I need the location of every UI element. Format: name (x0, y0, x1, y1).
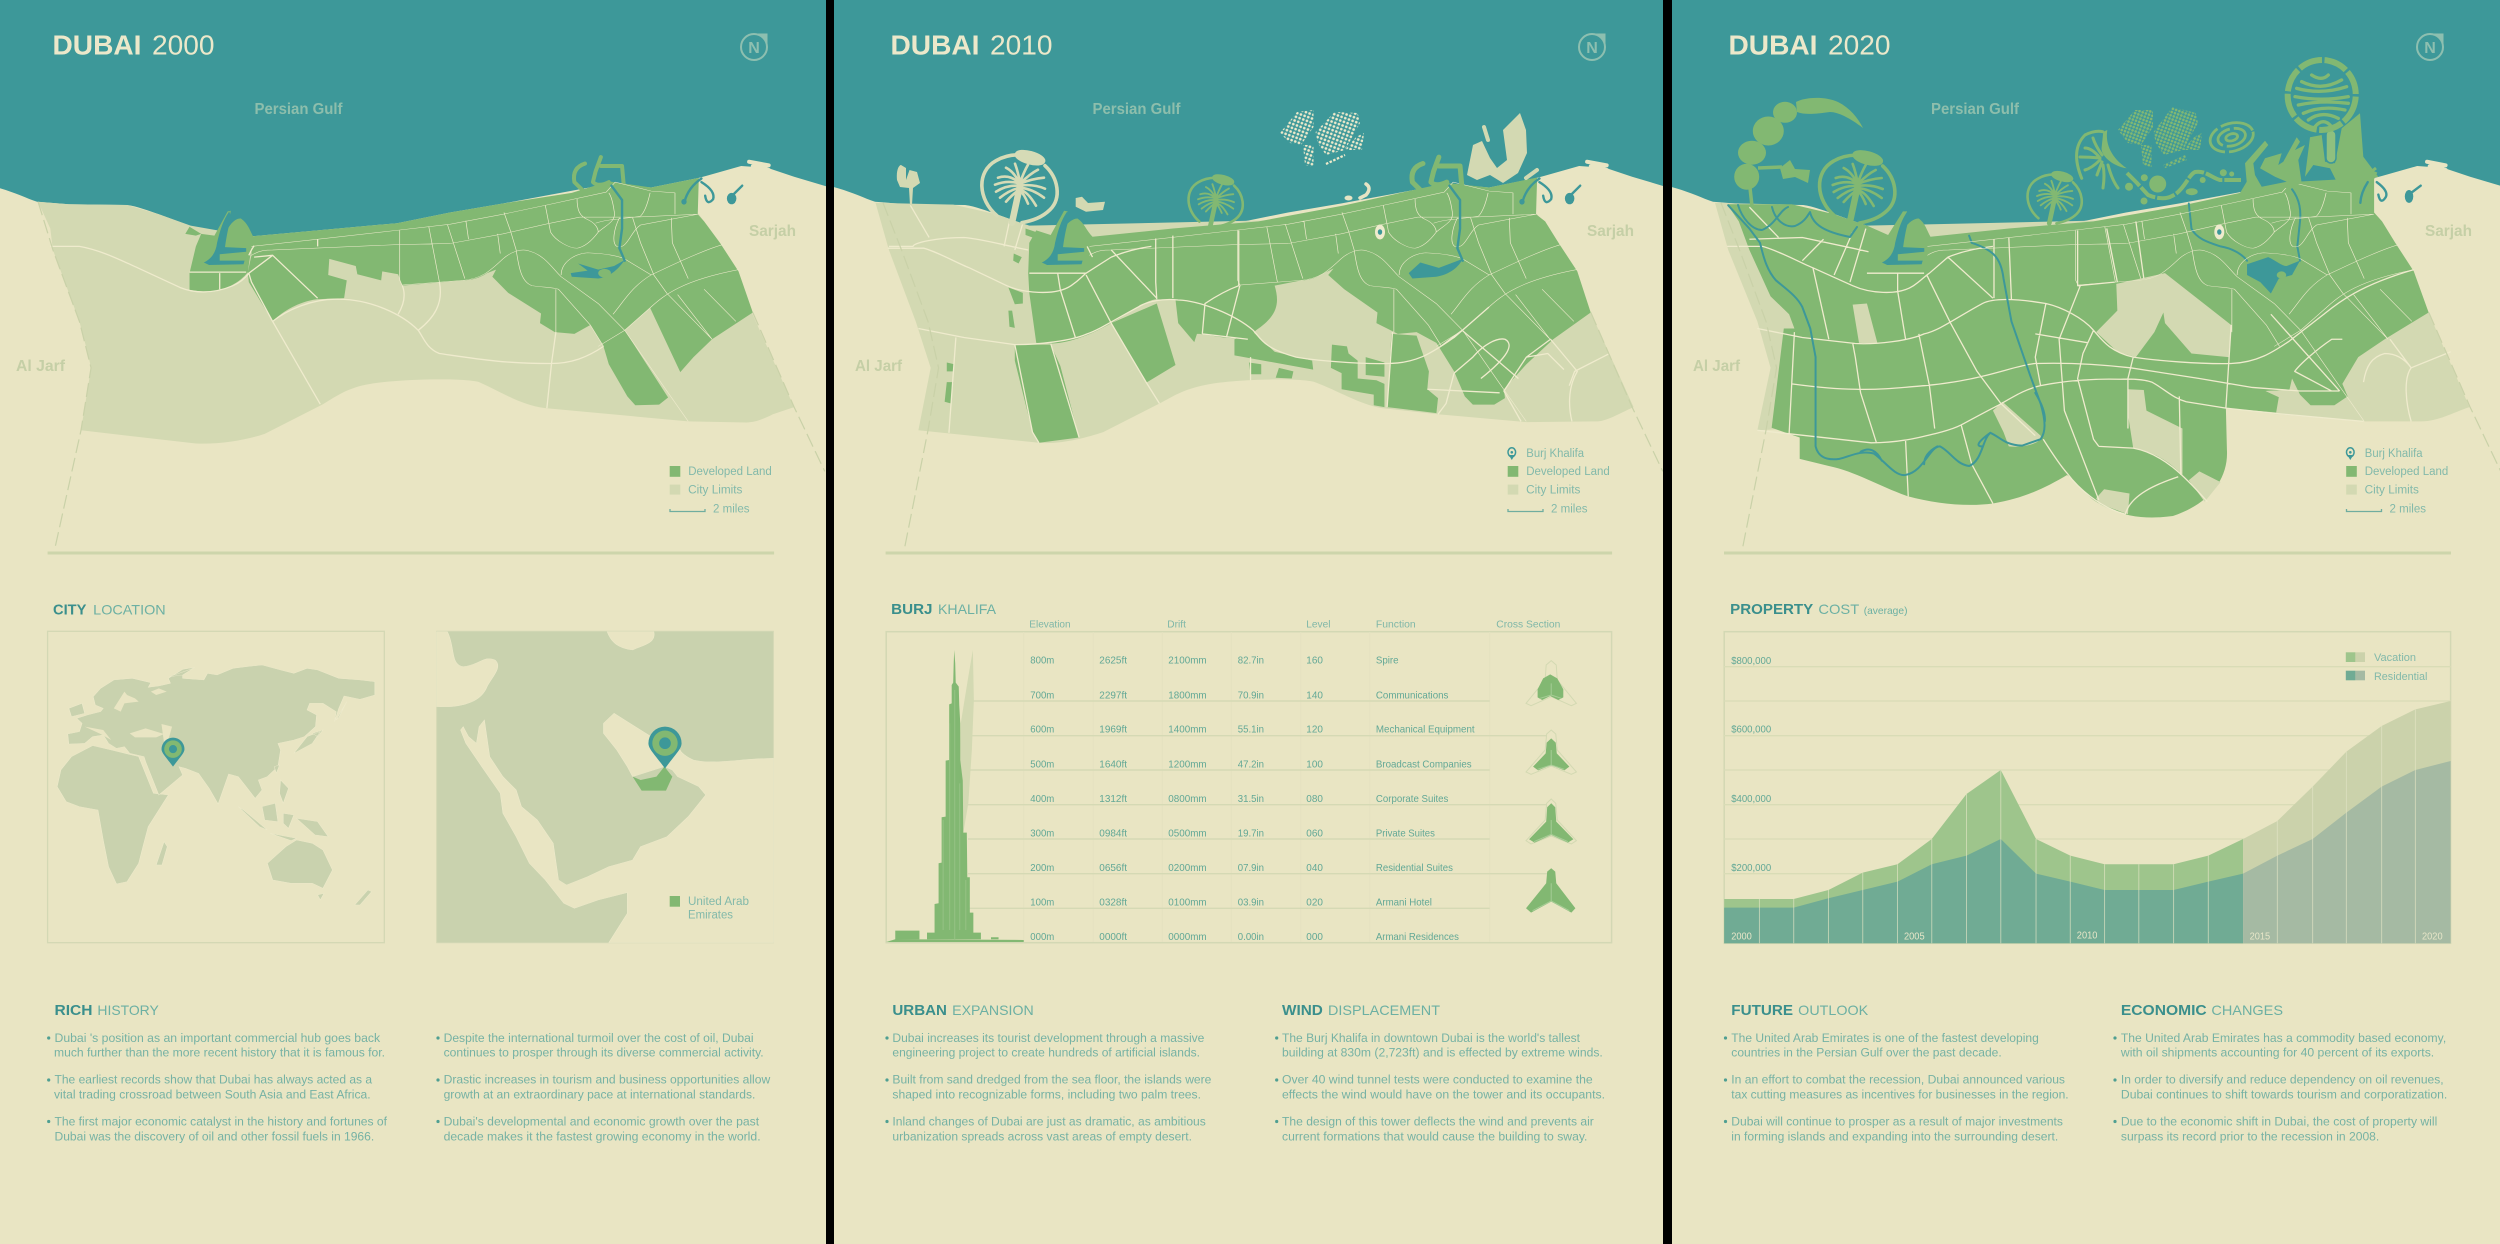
heading: burj khalifa: BURJ (891, 602, 932, 618)
table rows: 000 (1306, 932, 1323, 943)
table rows: 300m (1030, 828, 1054, 839)
text block: rich history (47, 1002, 770, 1143)
table rows: Corporate Suites (1376, 794, 1448, 805)
legend: Developed Land (2365, 466, 2448, 478)
table rows: Mechanical Equipment (1376, 725, 1475, 736)
chart legend (2346, 652, 2427, 683)
title: 2000 (152, 29, 214, 60)
heading: property cost: PROPERTY (1730, 602, 1814, 618)
world map (48, 631, 384, 943)
text block: wind displacement: The design of this tower deflects the wind and prevents air (1282, 1114, 1594, 1128)
table headers: Level (1306, 619, 1330, 630)
table rows: 0200mm (1168, 863, 1207, 874)
map labels (16, 101, 796, 375)
table headers: Cross Section (1496, 619, 1560, 630)
legend: Developed Land (1526, 466, 1610, 478)
chart legend: Residential (2374, 671, 2427, 683)
axis labels: 2005 (1904, 931, 1925, 942)
axis labels (1731, 656, 2443, 942)
text block: economic changes: with oil shipments accounting for 40 percent of its exports. (2120, 1046, 2434, 1060)
map labels: Al Jarf (16, 358, 66, 375)
table rows: 140 (1306, 690, 1323, 701)
text block: wind displacement: building at 830m (2,723ft) and is effected by extreme winds. (1282, 1046, 1603, 1060)
text block: wind displacement (1275, 1002, 1605, 1143)
map labels: Sarjah (1587, 223, 1634, 240)
icon: north: N (1586, 40, 1598, 57)
table rows: 31.5in (1238, 794, 1264, 805)
text block: economic changes: ECONOMIC (2121, 1003, 2207, 1019)
text block: wind displacement: DISPLACEMENT (1328, 1002, 1440, 1018)
text block: wind displacement: effects the wind would have on the tower and its occupants. (1282, 1087, 1605, 1101)
text block: urban expansion: urbanization spreads across vast areas of empty desert. (892, 1129, 1192, 1143)
axis labels: 2010 (2077, 930, 2098, 941)
map labels (1693, 101, 2472, 375)
text block: urban expansion: Dubai increases its tourist development through a massive (892, 1031, 1205, 1045)
table rows: Residential Suites (1376, 863, 1453, 874)
map labels: Persian Gulf (1931, 101, 2020, 118)
text block: urban expansion: engineering project to create hundreds of artificial islands. (892, 1046, 1200, 1060)
title: DUBAI (890, 29, 980, 60)
text block: economic changes (2113, 1002, 2447, 1143)
legend: City Limits (1526, 485, 1581, 497)
table rows: 2625ft (1099, 656, 1127, 667)
table rows: 160 (1306, 656, 1323, 667)
table rows: 0656ft (1099, 863, 1127, 874)
axis labels: $400,000 (1731, 794, 1772, 805)
legend: City Limits (688, 485, 743, 497)
table headers: Elevation (1029, 619, 1071, 630)
text block: rich history: RICH (54, 1003, 92, 1019)
sea (1660, 0, 2500, 236)
table rows: 82.7in (1238, 656, 1264, 667)
legend (670, 466, 772, 516)
table rows: 1640ft (1099, 759, 1127, 770)
text block: future outlook: FUTURE (1731, 1003, 1793, 1019)
icon: north (741, 34, 768, 60)
area chart: property cost (1724, 632, 2451, 943)
table rows: 100m (1030, 898, 1054, 909)
heading: city location (54, 604, 164, 614)
table headers (1030, 620, 1560, 628)
text block: rich history: much further than the more recent history that it is famous for. (54, 1046, 385, 1060)
table rows: 1312ft (1099, 794, 1127, 805)
table rows: Armani Residences (1376, 932, 1459, 943)
axis labels: 2020 (2422, 931, 2443, 942)
legend: Burj Khalifa (1526, 448, 1585, 460)
table rows: 0000mm (1168, 932, 1207, 943)
chart legend: Vacation (2374, 652, 2416, 664)
axis labels: 2015 (2250, 931, 2271, 942)
table rows: 060 (1306, 828, 1323, 839)
heading: city location: LOCATION (93, 601, 166, 617)
map: Dubai 2000 (38, 157, 825, 550)
title (1730, 35, 1890, 55)
table rows: 2100mm (1168, 656, 1207, 667)
table rows: 1400mm (1168, 725, 1207, 736)
text block: urban expansion (885, 1002, 1212, 1143)
table rows: 0100mm (1168, 898, 1207, 909)
table rows (1030, 656, 1475, 943)
map labels: Al Jarf (855, 358, 903, 375)
map: Dubai 2020 (1715, 55, 2500, 550)
regional map (437, 631, 773, 943)
text block: wind displacement: Over 40 wind tunnel tests were conducted to examine the (1282, 1073, 1593, 1087)
table rows: Armani Hotel (1376, 898, 1432, 909)
text block: rich history: The earliest records show that Dubai has always acted as a (54, 1073, 372, 1087)
table rows: 080 (1306, 794, 1323, 805)
title: DUBAI (1728, 29, 1818, 60)
legend (1508, 448, 1610, 516)
text block: rich history: continues to prosper through its diverse commercial activity. (444, 1046, 764, 1060)
map labels: Sarjah (749, 223, 796, 240)
table rows: 1800mm (1168, 690, 1207, 701)
text block: wind displacement: The Burj Khalifa in downtown Dubai is the world's tallest (1282, 1031, 1581, 1045)
text block: rich history: Despite the international turmoil over the cost of oil, Dubai (444, 1031, 754, 1045)
regional map: United Arab (688, 896, 749, 908)
marker: Burj Khalifa (1375, 224, 1385, 240)
title (892, 35, 1052, 55)
table rows: 800m (1030, 656, 1054, 667)
title (54, 35, 214, 55)
table rows: 040 (1306, 863, 1323, 874)
legend: 2 miles (713, 504, 750, 516)
heading: burj khalifa: KHALIFA (938, 601, 997, 617)
axis labels: $200,000 (1731, 863, 1772, 874)
text block: rich history: decade makes it the fastest growing economy in the world. (444, 1129, 761, 1143)
legend: City Limits (2365, 485, 2419, 497)
legend: Developed Land (688, 466, 772, 478)
table rows: 1200mm (1168, 759, 1207, 770)
text block: future outlook: In an effort to combat the recession, Dubai announced various (1731, 1073, 2065, 1087)
legend (2346, 448, 2448, 516)
table rows: 0000ft (1099, 932, 1127, 943)
table rows: Broadcast Companies (1376, 759, 1472, 770)
heading: city location: CITY (53, 602, 87, 618)
heading: burj khalifa (892, 604, 996, 614)
text block: rich history: Drastic increases in tourism and business opportunities allow (444, 1073, 770, 1087)
table rows: 0984ft (1099, 828, 1127, 839)
table rows: Communications (1376, 690, 1448, 701)
table rows: 03.9in (1238, 898, 1264, 909)
text block: future outlook (1724, 1002, 2069, 1143)
text block: urban expansion: Built from sand dredged from the sea floor, the islands were (892, 1073, 1212, 1087)
table headers: Drift (1167, 619, 1186, 630)
table: Burj Khalifa (886, 619, 1612, 943)
text block: rich history: The first major economic catalyst in the history and fortunes of (54, 1114, 388, 1128)
table rows: 020 (1306, 898, 1323, 909)
table rows: 100 (1306, 759, 1323, 770)
text block: future outlook: in forming islands and expanding into the surrounding desert. (1731, 1129, 2058, 1143)
heading: property cost: (average) (1864, 605, 1908, 617)
table rows: 0328ft (1099, 898, 1127, 909)
text block: urban expansion: Inland changes of Dubai are just as dramatic, as ambitious (892, 1114, 1206, 1128)
text block: future outlook: Dubai will continue to prosper as a result of major investments (1731, 1114, 2063, 1128)
table rows: 600m (1030, 725, 1054, 736)
table rows: 47.2in (1238, 759, 1264, 770)
table rows: Private Suites (1376, 828, 1435, 839)
table rows: 70.9in (1238, 690, 1264, 701)
map labels (855, 101, 1634, 375)
table rows: 0.00in (1238, 932, 1264, 943)
islands: 2010 (897, 110, 1537, 227)
islands: 2020 (1734, 55, 2378, 237)
text block: rich history: growth at an extraordinary pace at international standards. (444, 1087, 755, 1101)
sea (822, 0, 1685, 236)
icon: north: N (748, 40, 760, 57)
table rows: 0500mm (1168, 828, 1207, 839)
axis labels: $800,000 (1731, 656, 1772, 667)
text block: future outlook: OUTLOOK (1798, 1002, 1869, 1018)
panel: Dubai 2020 (1660, 0, 2500, 1244)
map labels: Persian Gulf (254, 101, 343, 118)
table rows: 200m (1030, 863, 1054, 874)
icon: north (2417, 34, 2444, 60)
text block: rich history: Dubai's developmental and economic growth over the past (444, 1114, 760, 1128)
table rows: 0800mm (1168, 794, 1207, 805)
title: DUBAI (52, 29, 142, 60)
map: Dubai 2010 (876, 110, 1663, 550)
text block: urban expansion: shaped into recognizable forms, including two palm trees. (892, 1087, 1201, 1101)
text block: economic changes: Due to the economic shift in Dubai, the cost of property will (2121, 1114, 2437, 1128)
table rows: 2297ft (1099, 690, 1127, 701)
panel: Dubai 2010 (822, 0, 1685, 1244)
table rows: 400m (1030, 794, 1054, 805)
axis labels: 2000 (1731, 931, 1752, 942)
text block: rich history: vital trading crossroad between South Asia and East Africa. (54, 1087, 371, 1101)
table rows: 120 (1306, 725, 1323, 736)
legend: Burj Khalifa (2365, 448, 2423, 460)
table rows: 1969ft (1099, 725, 1127, 736)
table rows: 19.7in (1238, 828, 1264, 839)
map labels: Sarjah (2425, 223, 2472, 240)
table rows: Spire (1376, 656, 1399, 667)
table rows: 07.9in (1238, 863, 1264, 874)
regional map: Emirates (688, 909, 733, 921)
table rows: 700m (1030, 690, 1054, 701)
heading: property cost (1731, 604, 1907, 616)
tower illustration (886, 650, 1024, 942)
title: 2020 (1828, 29, 1890, 60)
text block: urban expansion: URBAN (892, 1003, 947, 1019)
text block: future outlook: The United Arab Emirates is one of the fastest developing (1731, 1031, 2039, 1045)
panel: Dubai 2000 (0, 0, 847, 1244)
map labels: Al Jarf (1693, 358, 1741, 375)
text block: economic changes: In order to diversify and reduce dependency on oil revenues, (2121, 1073, 2444, 1087)
map labels: Persian Gulf (1092, 101, 1181, 118)
text block: economic changes: CHANGES (2211, 1002, 2283, 1018)
text block: rich history: Dubai was the discovery of oil and other fossil fuels in 1966. (54, 1129, 374, 1143)
axis labels: $600,000 (1731, 725, 1772, 736)
text block: economic changes: surpass its record prior to the recession in 2008. (2121, 1129, 2379, 1143)
title: 2010 (990, 29, 1052, 60)
text block: wind displacement: WIND (1282, 1003, 1323, 1019)
text block: rich history: Dubai 's position as an important commercial hub goes back (54, 1031, 381, 1045)
icon: north (1579, 34, 1606, 60)
text block: future outlook: countries in the Persian Gulf over the past decade. (1731, 1046, 2002, 1060)
table headers: Function (1376, 619, 1416, 630)
text block: future outlook: tax cutting measures as incentives for businesses in the region. (1731, 1087, 2069, 1101)
text block: urban expansion: EXPANSION (952, 1002, 1034, 1018)
heading: property cost: COST (1818, 601, 1860, 617)
text block: economic changes: The United Arab Emirates has a commodity based economy, (2121, 1031, 2446, 1045)
text block: wind displacement: current formations that would cause the building to sway. (1282, 1129, 1587, 1143)
icon: north: N (2424, 40, 2436, 57)
cross sections (1526, 661, 1576, 913)
marker: Burj Khalifa (2214, 224, 2224, 240)
table rows: 55.1in (1238, 725, 1264, 736)
text block: rich history: HISTORY (97, 1002, 159, 1018)
legend: 2 miles (1551, 504, 1588, 516)
table rows: 500m (1030, 759, 1054, 770)
text block: economic changes: Dubai continues to shift towards tourism and corporatization. (2121, 1087, 2447, 1101)
table rows: 000m (1030, 932, 1054, 943)
legend: 2 miles (2390, 504, 2426, 516)
sea (0, 0, 847, 236)
